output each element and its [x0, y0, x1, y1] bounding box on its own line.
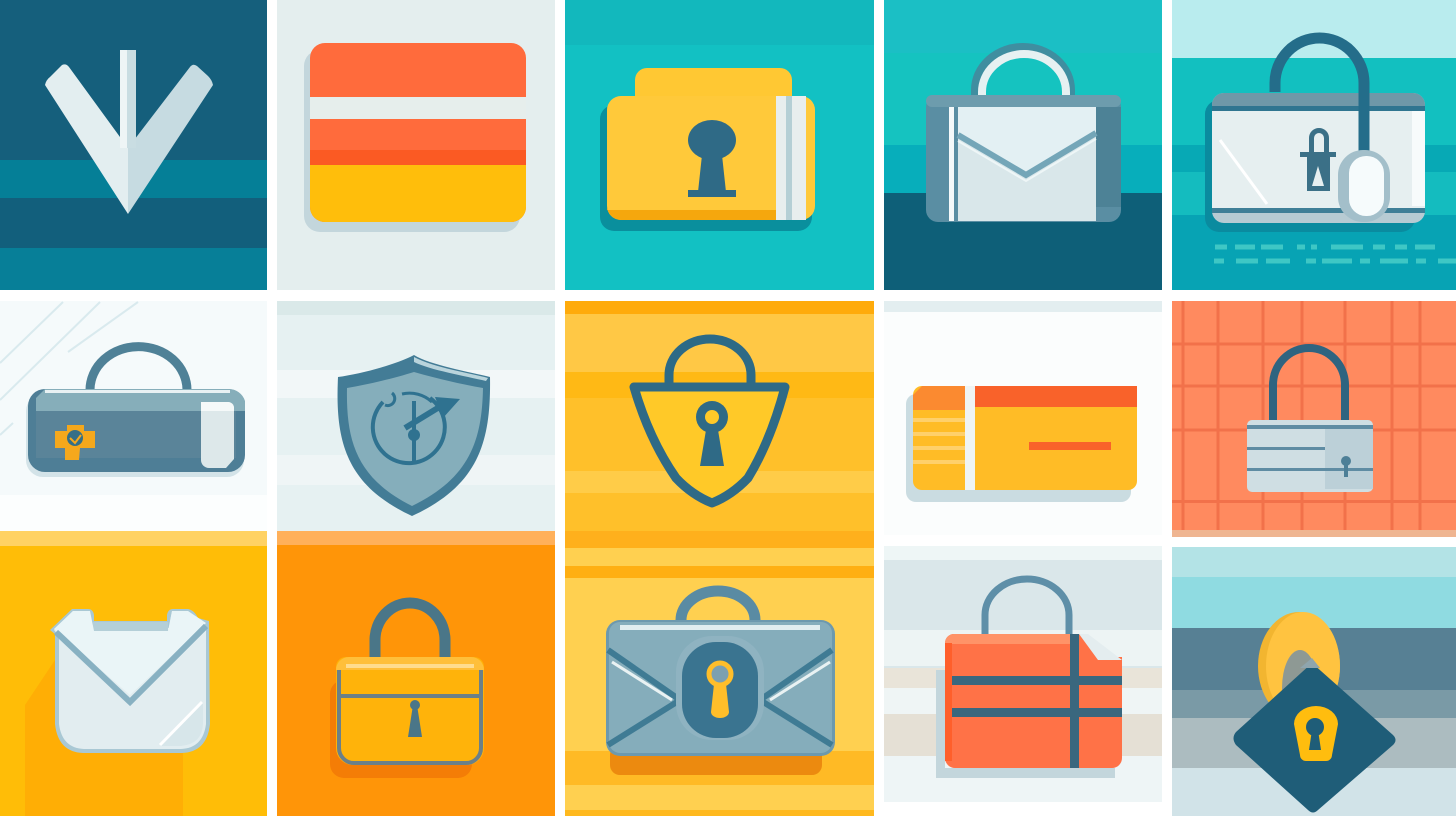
icon: shield: [338, 355, 490, 516]
icon: padlock shackle: [975, 47, 1071, 106]
icon: briefcase handle: [681, 591, 755, 622]
padlock shadow: [330, 680, 472, 778]
panel: arrow chevron on navy: [0, 0, 267, 290]
icon: clock with arrow: [373, 393, 445, 463]
icon: white bag: [1212, 93, 1425, 223]
panel: red and yellow card: [277, 0, 555, 290]
decorative dashes: [1214, 247, 1456, 261]
icon: envelope briefcase: [606, 620, 835, 756]
bag shadow: [1205, 100, 1415, 232]
icon: mouse: [1338, 150, 1390, 222]
icon: shackle: [1275, 38, 1364, 152]
panel: yellow folder with keyhole on teal: [565, 0, 874, 290]
icon: downward chevron arrow: [45, 50, 213, 214]
icon: ticket: [913, 386, 1137, 490]
panel: padlock with bag and mouse: [1172, 0, 1456, 290]
icon: padlock: [336, 603, 484, 765]
icon: padlock: [1247, 348, 1373, 492]
panel: grey envelope bag on teal: [884, 0, 1162, 290]
icon: bag handle: [90, 347, 187, 390]
icon: keyhole: [688, 120, 736, 197]
panel: diamond lock with yellow ring: [1172, 547, 1456, 816]
panel: yellow ticket on white: [884, 301, 1162, 535]
panel: yellow padlock on orange: [277, 531, 555, 816]
panel: red folder bag: [884, 546, 1162, 802]
icon: envelope: [50, 609, 210, 753]
icon: toolbag body: [26, 389, 245, 477]
icon: striped card: [310, 43, 526, 222]
panel: shield with clock: [277, 301, 555, 531]
icon: red tagged bag: [945, 634, 1122, 768]
icon: envelope bag: [926, 95, 1121, 222]
panel: triangular padlock on yellow: [565, 301, 874, 548]
panel: white envelope on amber: [0, 531, 267, 816]
icon: triangular padlock: [634, 339, 785, 503]
icon: folder: [607, 68, 815, 220]
panel: grey toolbag on white: [0, 301, 267, 531]
icon: diamond lock: [1234, 658, 1396, 812]
icon: yellow ring: [1258, 612, 1340, 726]
icon: yellow badge: [55, 425, 95, 460]
icon: keyhole: [696, 401, 728, 466]
panel: envelope briefcase on yellow: [565, 548, 874, 816]
icon: keyhole: [1294, 706, 1338, 761]
icon: small lock: [1300, 131, 1336, 191]
briefcase shadow: [610, 745, 822, 775]
icon: keyhole plate: [676, 636, 764, 740]
icon: shackle: [985, 579, 1069, 634]
panel: padlock on red plaid: [1172, 301, 1456, 537]
